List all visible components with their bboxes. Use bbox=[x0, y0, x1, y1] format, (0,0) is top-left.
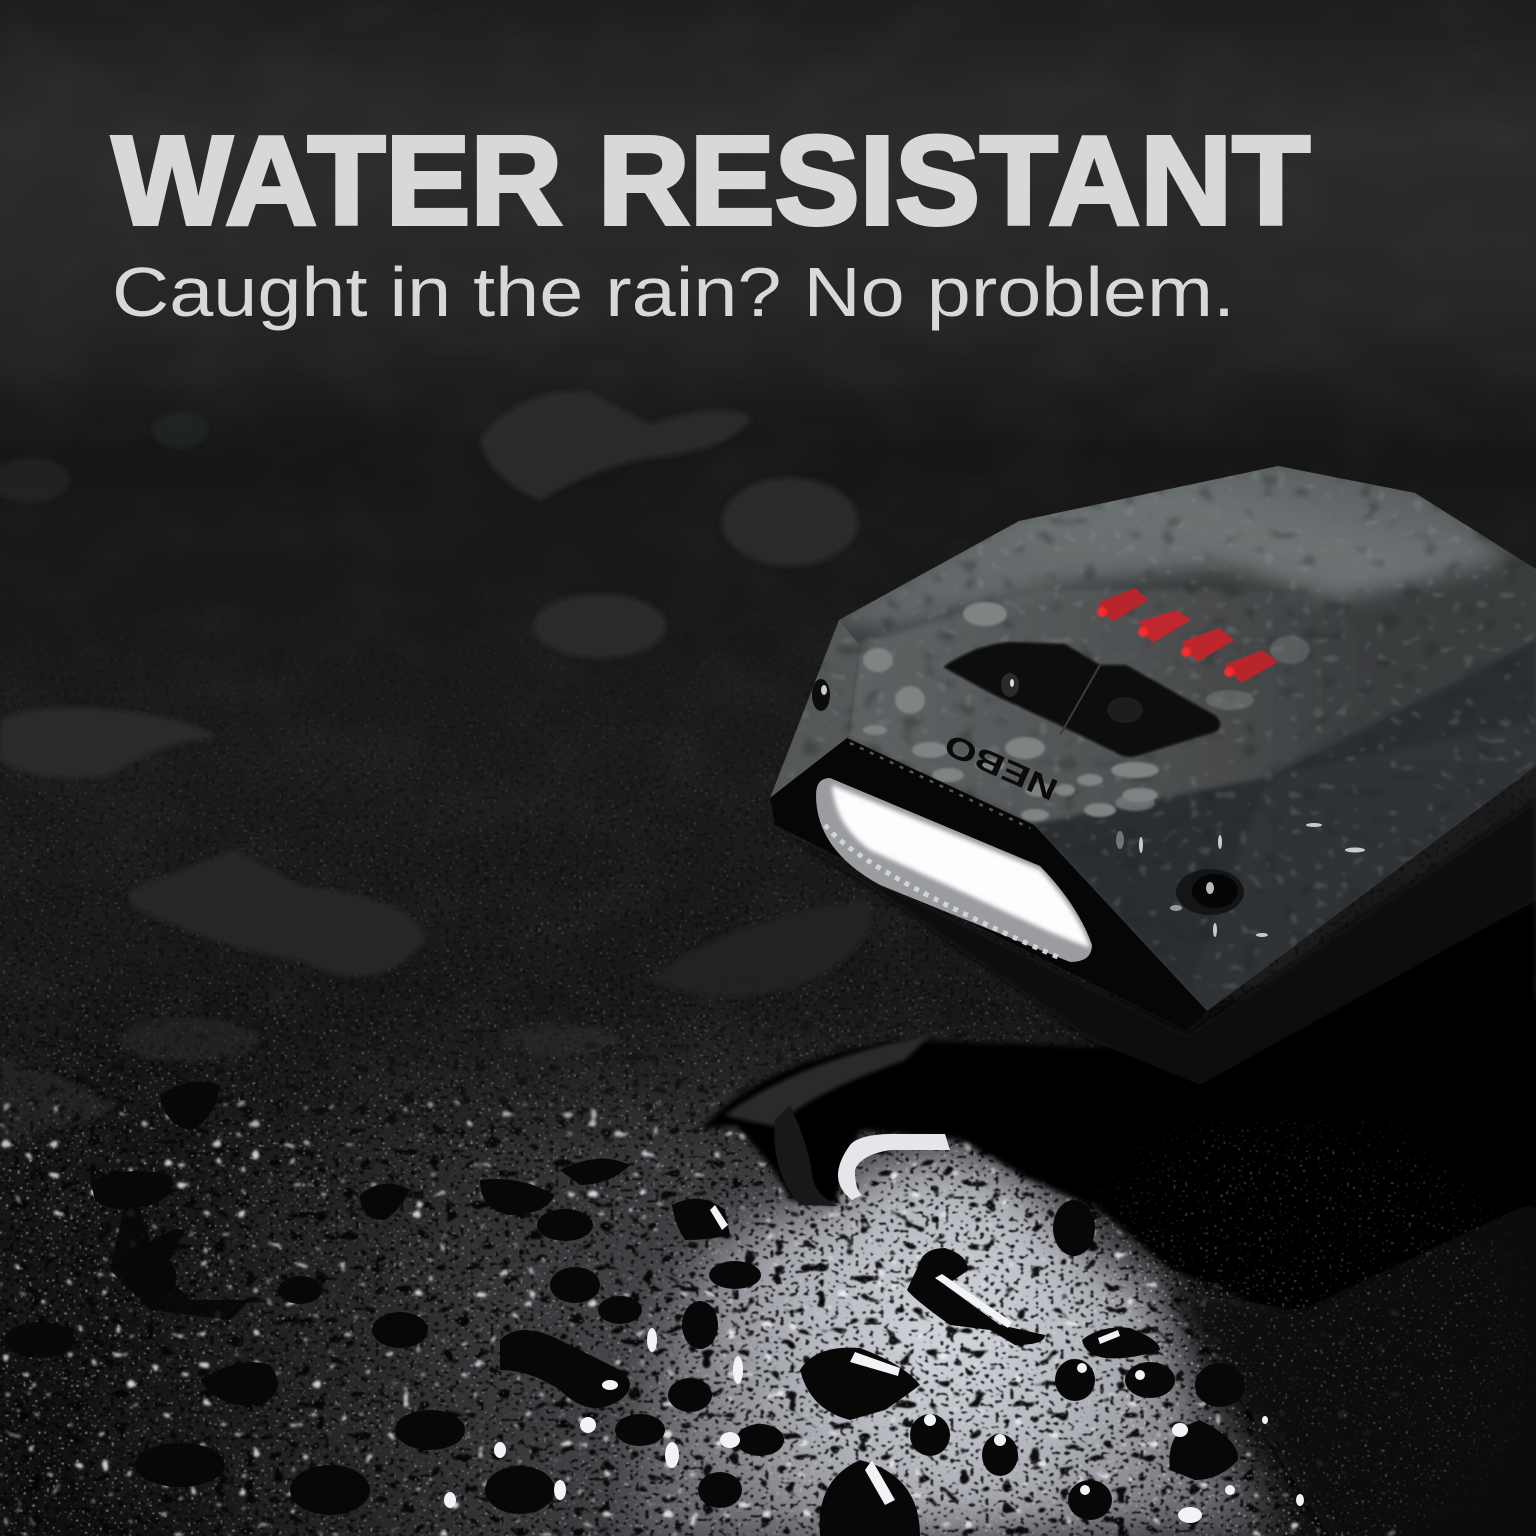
lit haze on the surface bbox=[190, 1043, 1304, 1536]
droplet texture on the puddle bbox=[0, 980, 1400, 1536]
brand logo: NEBO bbox=[940, 727, 1063, 806]
large black droplets bbox=[5, 1082, 1245, 1536]
device body outline bbox=[770, 466, 1536, 1011]
glowing LED lens bbox=[816, 778, 1092, 962]
headlamp device bbox=[770, 450, 1536, 1085]
side dome button bbox=[812, 679, 830, 711]
black lens frame bbox=[770, 738, 1207, 1031]
fine water droplet texture bbox=[0, 560, 1536, 1536]
lower dome water drop bbox=[1170, 869, 1244, 915]
sparkles in the dark right area bbox=[1050, 1120, 1536, 1536]
red battery LEDs bbox=[1097, 588, 1278, 683]
illuminated puddle bbox=[640, 1150, 1280, 1536]
device underside shadow bbox=[775, 800, 1536, 1085]
out-of-focus water puddles bbox=[0, 391, 871, 1150]
droplet highlights bbox=[444, 1205, 1304, 1523]
subtitle: Caught in the rain? No problem. bbox=[112, 253, 1235, 331]
droplet glints on lower facet bbox=[1116, 823, 1365, 937]
device shadow reflection bbox=[700, 900, 1536, 1536]
black rubber buttons bbox=[943, 642, 1220, 757]
title: WATER RESISTANT bbox=[112, 110, 1310, 251]
device facets and water beads bbox=[770, 450, 1536, 1020]
frame top edge glints bbox=[850, 743, 1030, 828]
